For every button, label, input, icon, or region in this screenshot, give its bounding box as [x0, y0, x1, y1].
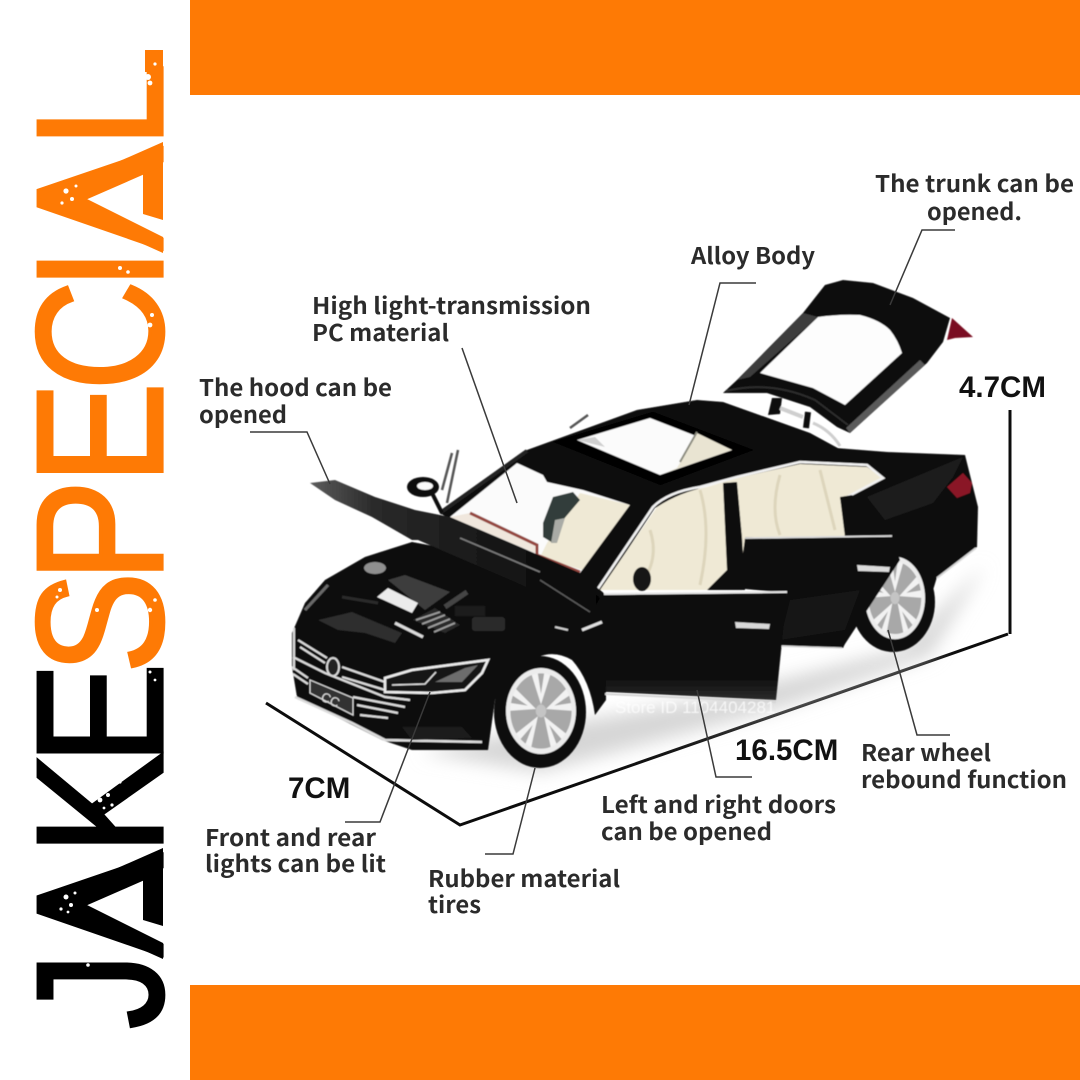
car model	[292, 280, 978, 768]
watermark: Store ID 1104404281	[615, 698, 775, 717]
trunk lid	[723, 280, 973, 433]
callout: PC material: PC material	[312, 314, 449, 348]
callout: trunk: The trunk can be	[875, 165, 1074, 199]
distressed specks	[56, 62, 157, 967]
bottom orange band	[190, 985, 1080, 1080]
callout: lights	[205, 692, 430, 879]
car shadow	[420, 565, 985, 772]
side window chrome arc	[597, 462, 883, 590]
side mirror	[407, 477, 442, 513]
rear body	[737, 447, 978, 600]
callout: PC material: High light-transmission	[312, 287, 591, 321]
lower intake	[402, 727, 472, 740]
vertical brand wordmark: JAKE	[0, 663, 201, 1029]
b-pillar	[707, 482, 745, 590]
callout: PC material	[312, 287, 591, 503]
callout: alloy body: Alloy Body	[690, 237, 815, 271]
seat shading	[640, 470, 835, 585]
callout: doors: can be opened	[601, 813, 772, 847]
floor dimension lines	[266, 634, 1008, 825]
headlight	[385, 660, 488, 693]
rear deck reflection	[867, 457, 963, 520]
rear light	[947, 473, 972, 498]
rear wheel	[851, 552, 935, 652]
letter L foot extension	[145, 50, 163, 72]
front open door	[604, 567, 787, 702]
callout: rear wheel: Rear wheel	[861, 734, 991, 768]
sunroof glass	[553, 412, 753, 485]
callout: tires	[428, 768, 620, 920]
open door edge pieces	[442, 415, 588, 503]
licence plate	[310, 680, 353, 715]
callout: tires: Rubber material	[428, 860, 620, 894]
windshield header rail	[517, 442, 660, 505]
callout: trunk	[875, 165, 1074, 305]
crossbar removal on the letter A shapes	[78, 162, 164, 944]
side opening interior	[600, 464, 883, 590]
dimension: width: 7CM	[288, 772, 350, 805]
engine bay	[305, 545, 602, 660]
top orange band	[190, 0, 1080, 95]
lower sill	[770, 600, 865, 648]
height dimension line	[1008, 410, 1012, 634]
windshield with interior	[450, 463, 630, 573]
front wheel	[494, 656, 586, 768]
trunk hinges	[768, 398, 840, 446]
callout: alloy body	[689, 237, 815, 405]
rear quarter dark piece	[840, 495, 868, 537]
callout: trunk: opened.	[927, 193, 1022, 227]
callout: rear wheel	[861, 630, 1067, 795]
grille chrome	[292, 628, 482, 742]
front body	[292, 542, 606, 750]
callout: hood	[199, 369, 392, 484]
vertical brand wordmark	[0, 50, 201, 1029]
callout: rear wheel: rebound function	[861, 761, 1067, 795]
vertical brand wordmark: SPECIAL	[0, 62, 201, 674]
roof	[440, 400, 845, 592]
windshield left pillar	[440, 451, 527, 513]
callout: doors: Left and right doors	[601, 786, 836, 820]
licence plate: CC	[319, 689, 342, 710]
callout: lights: lights can be lit	[205, 845, 386, 879]
callout: hood: opened	[199, 396, 287, 430]
a-pillar	[580, 503, 653, 587]
letter A heel details	[38, 142, 163, 959]
rear open door	[735, 536, 900, 647]
callout: tires: tires	[428, 886, 481, 920]
callout: doors	[601, 690, 836, 847]
callout: hood: The hood can be	[199, 369, 392, 403]
dimension: height: 4.7CM	[959, 371, 1046, 404]
rear chrome line	[937, 548, 976, 578]
VW badge	[327, 658, 339, 676]
dimension: length: 16.5CM	[735, 734, 838, 767]
callout: lights: Front and rear	[205, 819, 377, 853]
open hood	[310, 480, 600, 618]
